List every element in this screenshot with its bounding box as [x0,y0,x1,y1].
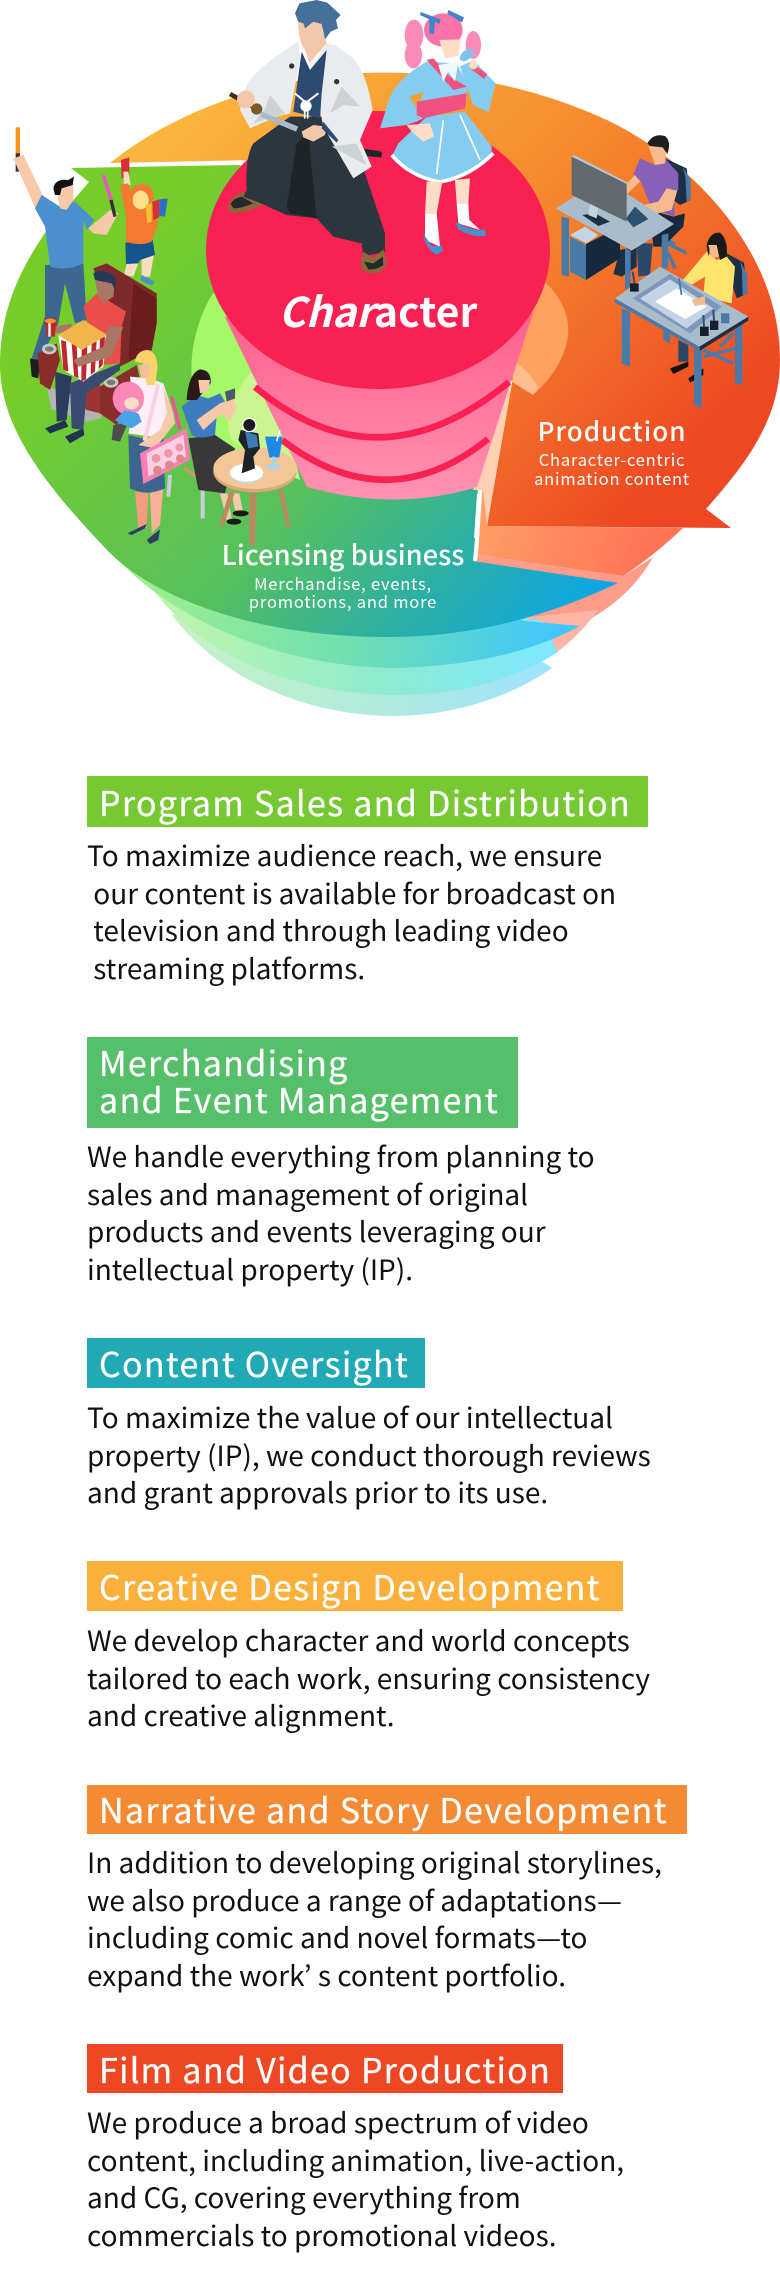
label: Licensing business: Licensing business [222,533,464,573]
heading: Merchandising and Event Management: Merchandising and Event Management [99,1037,499,1123]
icon: acrylic figure [238,430,260,473]
heading: Content Oversight: Content Oversight [99,1338,409,1387]
panel: licensing segment [0,165,618,637]
label: Character: Character [279,279,478,339]
illustration: samurai character [228,0,387,273]
heading: Film and Video Production: Film and Video Production [99,2044,551,2093]
panel: production segment [110,73,780,528]
label: Licensing business [222,533,464,613]
label: Production: Production [538,412,686,449]
text: Creative Design Development: We develop character and world concepts tailored to each work, ensuring consistency and creative alignment. [87,1620,650,1735]
decorative inner light layers [191,270,568,538]
icon: orange glow stick [16,127,20,154]
label: Production: animation content [534,466,690,490]
panel: character cylinder [206,111,550,500]
diagram: character business model [0,0,780,716]
illustration: idol character [380,10,496,255]
panel: production spiral back layers [470,477,683,652]
label: Licensing business: Merchandise, events, [254,571,432,595]
text: Film and Video Production: We produce a broad spectrum of video content, including animation, live-action, and CG, covering everything from commercials to promotional videos. [87,2102,624,2255]
doll [113,382,144,415]
label: Licensing business: promotions, and more [249,589,437,613]
seated woman with phone [168,475,203,518]
heading: Program Sales and Distribution: Program Sales and Distribution [99,777,631,826]
illustration: production staff at desks [556,135,748,408]
cinema seat [93,263,157,367]
illustrator at drawing table [727,253,747,298]
icon: blue drink [265,437,283,457]
panel: licensing spiral back layers [105,545,580,716]
text: Content Oversight: To maximize the value of our intellectual property (IP), we conduct thorough reviews and grant approvals prior to its use. [87,1397,651,1512]
table [219,490,291,545]
seated man [55,372,72,422]
heading: Creative Design Development: Creative Design Development [99,1561,601,1610]
text: Program Sales and Distribution: To maximize audience reach, we ensure our content is available for broadcast on television and through leading video streaming platforms. [87,835,616,988]
pc tower [570,227,598,243]
icon: popcorn bucket [58,335,107,382]
label: Production: Character-centric [539,447,685,471]
illustration: audience members and fans [13,127,297,545]
label: Production [534,412,690,490]
text: Merchandising and Event Management: We handle everything from planning to sales and management of original products and events leveraging our intellectual property (IP). [87,1136,595,1289]
computer desk [562,217,668,290]
text: Narrative and Story Development: In addition to developing original storylines, we also produce a range of adaptations— including comic and novel formats—to expand the work’ s content portfolio. [87,1842,662,1995]
artist at computer [665,158,691,205]
woman with bag [135,492,148,528]
heading: Narrative and Story Development: Narrative and Story Development [99,1784,668,1833]
